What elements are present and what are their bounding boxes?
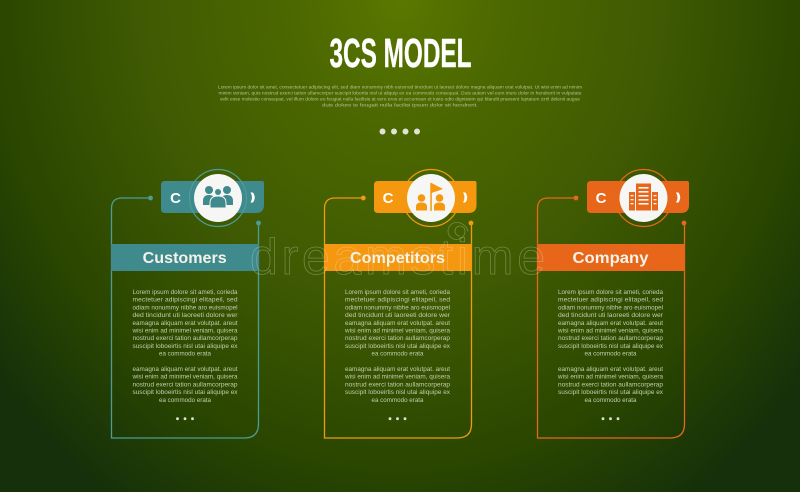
body text	[344, 289, 451, 404]
card dots	[176, 417, 194, 420]
card outline	[324, 198, 472, 438]
panel: customers	[111, 170, 264, 438]
body text: wisi enim ad minimel veniam, quisera	[557, 374, 663, 381]
body text	[132, 289, 238, 404]
body text: mectetuer adipiscingi elitapeil, sed	[132, 297, 238, 304]
icon: competitors flag	[407, 174, 455, 222]
body text: ea commodo erata	[159, 351, 211, 358]
connector dots	[574, 196, 686, 225]
body text: nostrud exerci tation aullamcorperap	[132, 381, 238, 388]
body text: suscipit loboeirtis nisl utai aliquipe ex	[345, 389, 451, 396]
icon ring	[402, 170, 460, 226]
body text: mectetuer adipiscingi elitapeil, sed	[345, 297, 450, 304]
body text: Lorem ipsum dolore sit ameti, corieda	[345, 289, 450, 296]
tab chevron	[250, 192, 255, 202]
body text: nostrud exerci tation aullamcorperap	[345, 335, 450, 342]
heading: Company	[572, 250, 649, 267]
panel: competitors	[324, 170, 476, 438]
subtitle text block: velit esse molestie consequat, vel illum dolore eu feugiat nulla facilisis at vero eros et accumsan et iusto odio dignissim qui blandit praesent luptatum zzril delenit augue	[220, 96, 580, 102]
body text: nostrud exerci tation aullamcorperap	[132, 335, 238, 342]
card outline	[112, 198, 258, 438]
icon ring	[190, 170, 246, 226]
card outline	[538, 198, 684, 438]
connector dots	[148, 196, 261, 225]
body text: Lorem ipsum dolore sit ameti, corieda	[132, 289, 238, 296]
body text: wisi enim ad minimel veniam, quisera	[344, 328, 450, 334]
body text: ea commodo erata	[584, 397, 637, 404]
body text: nostrud exerci tation aullamcorperap	[345, 381, 450, 388]
tab letter: C	[596, 190, 607, 207]
body text: eamagna aliquam erat volutpat. areut	[345, 366, 450, 373]
body text: ded tincidunt uti laoreeti dolore wer	[132, 312, 238, 319]
body text: ea commodo erata	[159, 397, 211, 404]
body text: Lorem ipsum dolore sit ameti, corieda	[558, 289, 663, 296]
body text: wisi enim ad minimel veniam, quisera	[132, 374, 238, 381]
subtitle text block	[218, 84, 582, 108]
subtitle text block: Lorem ipsum dolor sit amet, consectetuer adipiscing elit, sed diam nonummy nibh euismod tincidunt ut laoreet dolore magna aliquam erat volutpat. Ut wisi enim ad minim	[218, 84, 582, 90]
panel: company	[537, 170, 689, 438]
body text: eamagna aliquam erat volutpat. areut	[558, 320, 663, 327]
body text: wisi enim ad minimel veniam, quisera	[344, 374, 450, 381]
body text: suscipit loboeirtis nisl utai aliquipe ex	[558, 389, 664, 396]
body text: eamagna aliquam erat volutpat. areut	[132, 366, 238, 373]
body text: odiam nonummy nibhe aro euismopel	[558, 304, 663, 311]
heading band	[324, 244, 472, 271]
body text: nostrud exerci tation aullamcorperap	[558, 335, 663, 342]
body text: nostrud exerci tation aullamcorperap	[558, 381, 663, 388]
card dots	[602, 417, 619, 420]
body text: suscipit loboeirtis nisl utai aliquipe ex	[558, 343, 664, 350]
body text: ea commodo erata	[372, 397, 424, 404]
body text: eamagna aliquam erat volutpat. areut	[132, 320, 238, 327]
header tab	[587, 181, 689, 213]
heading band	[537, 244, 685, 271]
pagination dots	[380, 128, 420, 134]
body text: suscipit loboeirtis nisl utai aliquipe ex	[132, 389, 238, 396]
tab chevron	[676, 192, 680, 202]
icon: company building	[620, 174, 668, 222]
body text: ea commodo erata	[372, 351, 424, 358]
body text: eamagna aliquam erat volutpat. areut	[345, 320, 450, 327]
heading band	[111, 244, 259, 271]
header tab	[374, 181, 476, 213]
body text	[557, 289, 664, 404]
tab letter: C	[383, 190, 394, 207]
body text: ea commodo erata	[584, 351, 637, 358]
body text: ded tincidunt uti laoreeti dolore wer	[345, 312, 451, 319]
body text: wisi enim ad minimel veniam, quisera	[132, 328, 238, 334]
subtitle text block: minim veniam, quis nostrud exerci tation ullamcorper suscipit lobortis nisl ut aliquip ex ea commodo consequat. Duis autem vel eum iriure dolor in hendrerit in vulputate	[218, 90, 582, 96]
watermark: dreamstime	[250, 229, 545, 285]
body text: ded tincidunt uti laoreeti dolore wer	[558, 312, 664, 319]
heading: Customers	[143, 250, 227, 267]
body text: odiam nonummy nibhe aro euismopel	[345, 304, 450, 311]
card dots	[389, 417, 406, 420]
body text: odiam nonummy nibhe aro euismopel	[132, 304, 238, 311]
body text: wisi enim ad minimel veniam, quisera	[557, 328, 663, 334]
subtitle text block: duis dolore te feugait nulla facilisi ipsum dolor sit hendrerit.	[322, 102, 478, 108]
body text: eamagna aliquam erat volutpat. areut	[558, 366, 663, 373]
header tab	[161, 181, 264, 213]
tab letter: C	[170, 190, 181, 207]
heading: Competitors	[350, 250, 445, 267]
title: 3CS MODEL	[330, 30, 472, 76]
tab chevron	[463, 192, 467, 202]
body text: suscipit loboeirtis nisl utai aliquipe ex	[132, 343, 238, 350]
icon ring	[615, 170, 672, 226]
body text: mectetuer adipiscingi elitapeil, sed	[558, 297, 663, 304]
icon: customers group	[194, 174, 242, 222]
body text: suscipit loboeirtis nisl utai aliquipe ex	[345, 343, 451, 350]
connector dots	[361, 196, 473, 225]
